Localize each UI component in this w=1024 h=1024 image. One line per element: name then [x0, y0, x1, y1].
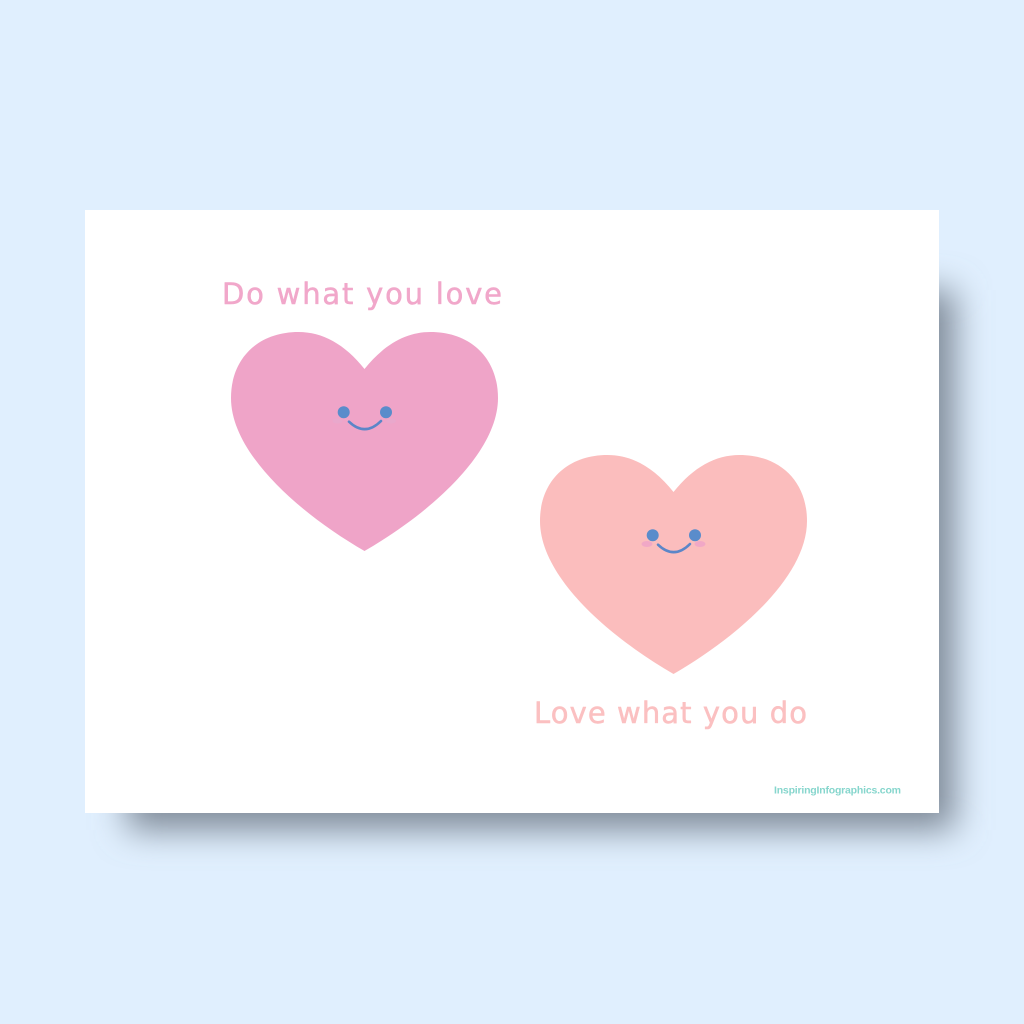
- heading: love what you do: Love what you do: [534, 696, 807, 730]
- card drop shadow: [127, 290, 955, 830]
- credit: website: InspiringInfographics.com: [774, 784, 901, 796]
- panel: white card: [85, 210, 939, 813]
- icon: pink smiling heart: [231, 332, 498, 551]
- heading: do what you love: Do what you love: [222, 277, 502, 311]
- icon: peach smiling heart: [540, 455, 807, 674]
